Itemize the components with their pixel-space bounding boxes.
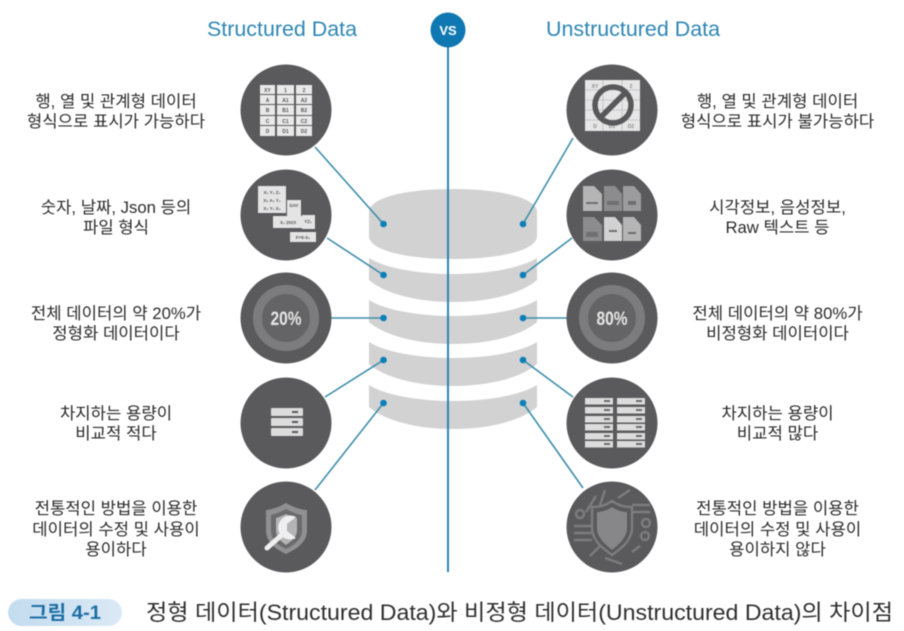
caption: 정형 데이터(Structured Data)와 비정형 데이터(Unstructured Data)의 차이점	[146, 600, 893, 625]
left text: row 4	[60, 404, 172, 443]
left text: row 3: 전체 데이터의 약 20%가	[31, 304, 201, 323]
icon: table: B2	[301, 108, 307, 114]
right text: row 2	[709, 198, 846, 237]
left text: row 5	[32, 499, 200, 559]
icon: data format cards: X₂ A₁ Y₁	[263, 198, 281, 203]
icon: table	[240, 64, 332, 156]
right text: row 5: 전통적인 방법을 이용한	[696, 499, 859, 518]
figure label pill	[8, 599, 122, 626]
vs badge	[430, 12, 466, 48]
icon: data format cards	[240, 170, 332, 260]
heading: unstructured data: Unstructured Data	[546, 17, 720, 41]
icon: table: D	[266, 129, 270, 135]
right text: row 4: 비교적 많다	[737, 424, 818, 443]
icon: table: C	[266, 119, 270, 125]
icon: large server stack	[566, 378, 658, 468]
icon: table: D2	[301, 129, 307, 135]
left text: row 3: 정형화 데이터이다	[52, 324, 180, 343]
left text: row 4: 비교적 적다	[75, 424, 157, 443]
right text: row 2: 시각정보, 음성정보,	[709, 198, 846, 217]
icon: 20 percent ring: 20%	[270, 308, 302, 330]
right text: row 3	[692, 304, 863, 343]
icon: table: A	[266, 98, 270, 104]
left text: row 2: 숫자, 날짜, Json 등의	[41, 198, 191, 217]
left text: row 5: 전통적인 방법을 이용한	[35, 499, 197, 518]
icon: data format cards: DAY	[289, 203, 299, 208]
icon: data format cards: F=0-X₁	[296, 235, 310, 240]
heading: structured data: Structured Data	[207, 17, 357, 41]
left text: row 2	[41, 198, 191, 237]
center divider line	[447, 30, 449, 572]
left text: row 4: 차지하는 용량이	[60, 404, 172, 423]
icon: prohibited table	[566, 64, 658, 156]
icon: table: XY	[264, 88, 271, 94]
icon: table: B	[266, 108, 270, 114]
icon: data format cards: X₃ Y₁ X₂	[263, 206, 281, 211]
left text: row 5: 데이터의 수정 및 사용이	[32, 520, 200, 539]
icon: data format cards: X₁ 2023	[280, 220, 297, 225]
icon: table: A2	[301, 98, 307, 104]
left text: row 1: 형식으로 표시가 가능하다	[27, 112, 205, 131]
right text: row 5: 용이하지 않다	[729, 540, 826, 559]
left text: row 1: 행, 열 및 관계형 데이터	[35, 92, 197, 111]
icon: table: C1	[282, 119, 289, 125]
right text: row 3: 비정형화 데이터이다	[706, 324, 849, 343]
icon: table: 1	[284, 88, 287, 94]
icon: prohibited table: 2	[630, 84, 633, 90]
icon: file types	[566, 170, 658, 260]
right text: row 1: 행, 열 및 관계형 데이터	[697, 92, 858, 111]
icon: table: D1	[282, 129, 289, 135]
right text: row 3: 전체 데이터의 약 80%가	[692, 304, 863, 323]
connector lines left	[315, 147, 384, 490]
icon: prohibited table: XY	[592, 84, 599, 90]
icon: shield with wrench	[240, 482, 332, 572]
icon: 20 percent ring	[240, 272, 332, 364]
right text: row 1	[681, 92, 874, 131]
right text: row 4	[721, 404, 834, 443]
icon: data format cards: X₁ Y₁ Z₁	[264, 190, 281, 195]
left text: row 2: 파일 형식	[83, 218, 149, 237]
right text: row 1: 형식으로 표시가 불가능하다	[681, 112, 874, 131]
icon: prohibited table: D1	[609, 124, 615, 130]
icon: table: B1	[282, 108, 289, 114]
connector dots	[380, 221, 526, 406]
icon: small server stack	[240, 378, 332, 468]
left text: row 3	[31, 304, 201, 343]
right text: row 5	[694, 499, 861, 559]
figure label pill: 그림 4-1	[29, 602, 101, 624]
right text: row 2: Raw 텍스트 등	[725, 218, 830, 237]
icon: prohibited table: D	[593, 124, 597, 130]
left text: row 1	[27, 92, 205, 131]
icon: table: 2	[303, 88, 306, 94]
right text: row 5: 데이터의 수정 및 사용이	[694, 520, 861, 539]
icon: 80 percent ring	[566, 272, 658, 364]
icon: table: C2	[301, 119, 307, 125]
database cylinder	[369, 189, 537, 429]
icon: 80 percent ring: 80%	[596, 308, 628, 330]
icon: table: A1	[282, 98, 289, 104]
icon: prohibited table: D2	[628, 124, 634, 130]
icon: data format cards: YZ₁	[304, 219, 312, 224]
vs badge: VS	[439, 23, 457, 38]
connector lines right	[523, 138, 583, 488]
icon: shield with tools	[566, 482, 658, 572]
left text: row 5: 용이하다	[85, 540, 147, 559]
right text: row 4: 차지하는 용량이	[721, 404, 834, 423]
